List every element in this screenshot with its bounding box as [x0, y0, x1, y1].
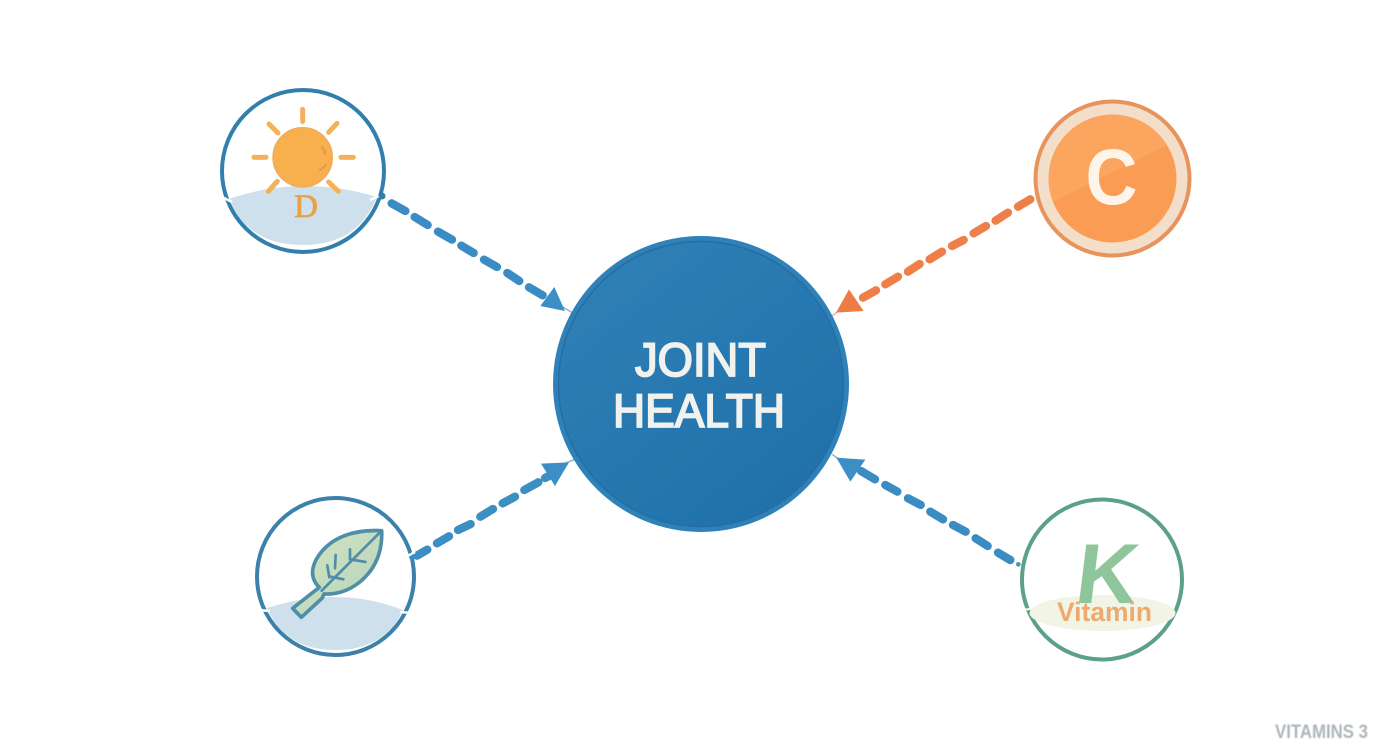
panel: vitamin D circle [222, 90, 386, 252]
ground ellipse [1030, 595, 1176, 631]
arrow: vitamin D to joint health [392, 203, 572, 312]
heading: joint: JOINT [635, 333, 766, 386]
arrow: vitamin K to joint health [832, 454, 1021, 567]
central circle: joint health [553, 236, 849, 532]
icon: sun [254, 109, 353, 191]
panel: vitamin C circle [1036, 102, 1190, 256]
water area [229, 186, 377, 245]
arrow: vitamin C to joint health [832, 199, 1030, 316]
panel: vitamin K circle [1022, 500, 1182, 660]
label: Vitamin: Vitamin [1057, 597, 1152, 627]
heading: health: HEALTH [613, 384, 785, 437]
arrow: leaf vitamin to joint health [417, 459, 575, 556]
all diagram artwork [222, 90, 1368, 743]
highlight [1049, 115, 1167, 202]
label: C: C [1086, 132, 1138, 221]
water area [267, 597, 403, 650]
label: D: D [294, 189, 318, 225]
label: K: K [1071, 527, 1144, 622]
arrow start nub [410, 556, 415, 559]
watermark: vitamins 3: VITAMINS 3 [1275, 722, 1368, 743]
icon: leaf [293, 531, 382, 617]
panel: leaf vitamin circle [257, 498, 415, 655]
